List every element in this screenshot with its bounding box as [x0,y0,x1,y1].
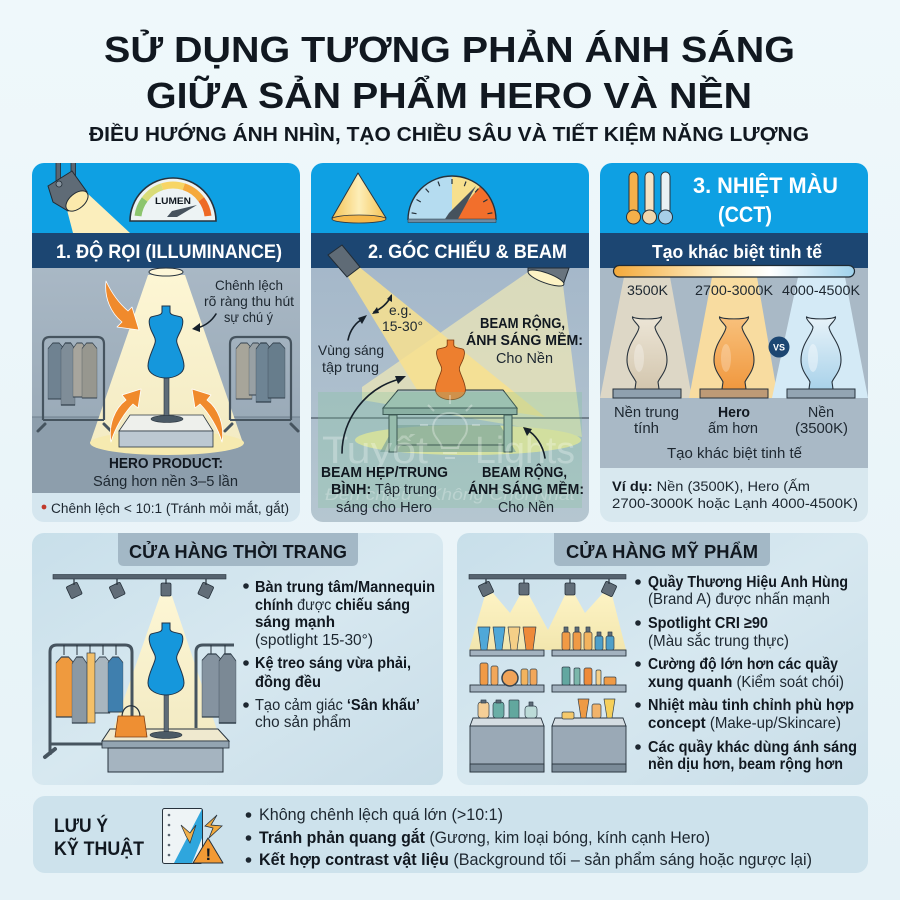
notes list: Tránh phản quang gắt (Gương, kim loại bóng, kính cạnh Hero) [259,828,710,847]
wide beam label upper: BEAM RỘNG, [480,314,565,332]
heading: LƯU Ý [54,815,108,837]
bullet list: sáng mạnh [255,614,335,631]
focus zone label: Vùng sáng [318,342,384,358]
bullet list: cho sản phẩm [255,713,351,731]
wide beam label upper: Cho Nền [496,351,553,367]
wide beam label lower: BEAM RỘNG, [482,463,567,481]
notes list: Không chênh lệch quá lớn (>10:1) [259,806,503,824]
heading [54,815,144,860]
kelvin labels: 4000-4500K [782,283,860,298]
angle annotation: e.g. [389,302,412,318]
cosmetic products lower counter [478,699,615,719]
annotation: attention: Chênh lệch [215,277,283,293]
heading tab: CỬA HÀNG THỜI TRANG [129,541,347,562]
heading tab [118,533,358,566]
note: contrast limit: Chênh lệch < 10:1 (Tránh mỏi mắt, gắt) [51,501,289,516]
panel: 2. beam angle [311,163,589,522]
subtitle: ĐIỀU HƯỚNG ÁNH NHÌN, TẠO CHIỀU SÂU VÀ TIẾT KIỆM NĂNG LƯỢNG [89,122,809,146]
kelvin labels [628,286,860,295]
bullet list: đồng đều [255,674,321,691]
narrow beam label [321,376,448,516]
colour temperature scale bar [614,266,854,277]
wide beam label lower: Cho Nền [498,500,554,516]
clothing rack left [38,337,111,431]
central table with mannequin and bag [102,623,229,772]
vase captions: (3500K) [795,421,848,437]
vase captions: Tạo khác biệt tinh tế [667,446,802,462]
kelvin labels: 2700-3000K [695,283,773,298]
orange arrows pointing to hero [106,281,223,442]
vase captions: Nền [808,405,834,421]
kelvin labels: 3500K [627,283,668,298]
subheading: Tạo khác biệt tinh tế [652,242,823,262]
wide beam label lower [468,427,584,516]
watermark: Đèn chiếu - Không Chói Nhất [325,485,576,504]
hero product caption [93,456,238,490]
counters [470,718,626,772]
shelves [470,650,626,692]
vase captions: Hero [718,405,750,421]
watermark: Tuyốt [322,430,428,472]
annotation: attention [192,277,294,332]
vs badge [768,336,790,358]
panel: fashion store [32,533,443,785]
vase captions: ấm hơn [708,421,758,437]
title: GIỮA SẢN PHẨM HERO VÀ NỀN [146,74,752,116]
example note [612,478,858,511]
vase: neutral [600,277,692,398]
bullet list: chính được chiếu sáng [255,597,410,614]
bullet list: concept (Make-up/Skincare) [648,715,841,732]
vase: cool [772,277,868,398]
panel: 1. illuminance [32,160,300,522]
bullet list: Nhiệt màu tinh chỉnh phù hợp [648,697,854,714]
wide beam label lower: ÁNH SÁNG MỀM: [468,481,584,498]
wide beam label upper: ÁNH SÁNG MỀM: [466,332,583,349]
left clothing rack [45,645,132,757]
narrow beam [328,245,545,417]
icon: track spotlight with beam [48,160,130,233]
cosmetic products middle shelf [480,663,616,686]
annotation: attention: sự chú ý [224,309,273,325]
heading: 2. GÓC CHIẾU & BEAM [368,241,567,263]
bullet list: Kệ treo sáng vừa phải, [255,655,411,672]
example note: 2700-3000K hoặc Lạnh 4000-4500K) [612,495,858,511]
title [104,28,795,116]
narrow beam label: sáng cho Hero [336,500,432,516]
notes list [246,806,812,869]
icon: light cone [332,173,386,223]
heading: 3. NHIỆT MÀU [693,173,838,198]
icon: lumen gauge [130,178,216,221]
title: SỬ DỤNG TƯƠNG PHẢN ÁNH SÁNG [104,28,795,70]
wide beam label upper [466,314,583,367]
heading [693,173,838,227]
notes list: Kết hợp contrast vật liệu (Background tối – sản phẩm sáng hoặc ngược lại) [259,851,812,869]
icon: glare warning: ! [206,845,211,864]
panel: technical notes [33,796,868,873]
icon: thermometers [626,172,672,224]
watermark [318,392,582,508]
track lights [53,574,226,730]
example note: Ví dụ: Nền (3500K), Hero (Ấm [612,478,810,494]
narrow beam label: BEAM HẸP/TRUNG [321,465,448,481]
cosmetic products top shelf [478,627,614,650]
bullet list: (spotlight 15-30°) [255,632,373,649]
vase captions: tính [634,421,659,437]
bullet list: xung quanh (Kiểm soát chói) [648,673,844,691]
bullet list: Tạo cảm giác ‘Sân khấu’ [255,697,420,714]
bullet list: Các quầy khác dùng ánh sáng [648,739,857,756]
vase: hero warm [689,277,778,398]
heading: KỸ THUẬT [54,838,144,860]
vase captions: Nền trung [614,405,679,421]
icon: glare warning [162,808,223,864]
bullet list: Cường độ lớn hơn các quầy [648,656,838,673]
bullet list: Quầy Thương Hiệu Anh Hùng [648,574,848,591]
vase captions [614,405,848,462]
angle annotation [372,294,423,334]
track lights with beams [469,574,626,650]
icon: beam angle gauge [408,176,496,222]
display table [380,390,517,452]
narrow beam label: BÌNH: Tập trung [331,481,437,498]
icon: lumen gauge: LUMEN [155,196,191,207]
watermark: Lights [475,430,575,472]
annotation: attention: rõ ràng thu hút [204,293,294,309]
vs badge: VS [773,342,785,354]
bullet list [635,574,857,773]
heading: 1. ĐỘ RỌI (ILLUMINANCE) [56,241,282,263]
bullet list: Bàn trung tâm/Mannequin [255,579,435,596]
heading tab: CỬA HÀNG MỸ PHẨM [566,541,758,562]
hero mannequin orange [436,340,465,400]
hero product caption: HERO PRODUCT: [109,456,223,472]
bullet list: (Brand A) được nhấn mạnh [648,591,830,608]
heading: (CCT) [718,202,772,227]
clothing rack right [225,337,298,431]
focus zone label [318,315,384,375]
bullet list: (Màu sắc trung thực) [648,631,789,650]
heading tab [554,533,770,566]
hero product caption: Sáng hơn nền 3–5 lần [93,474,238,490]
beam of light on hero [90,268,244,455]
bullet list: Spotlight CRI ≥90 [648,615,768,632]
wide beam [355,267,582,455]
right clothing rack [196,645,236,728]
bullet list: nền dịu hơn, beam rộng hơn [648,756,843,773]
focus zone label: tập trung [322,359,379,375]
bullet list [243,579,435,731]
panel: cosmetics store [457,533,868,785]
angle annotation: 15-30° [382,318,423,334]
hero mannequin on platform [119,306,213,447]
panel: 3. colour temperature [600,163,868,522]
